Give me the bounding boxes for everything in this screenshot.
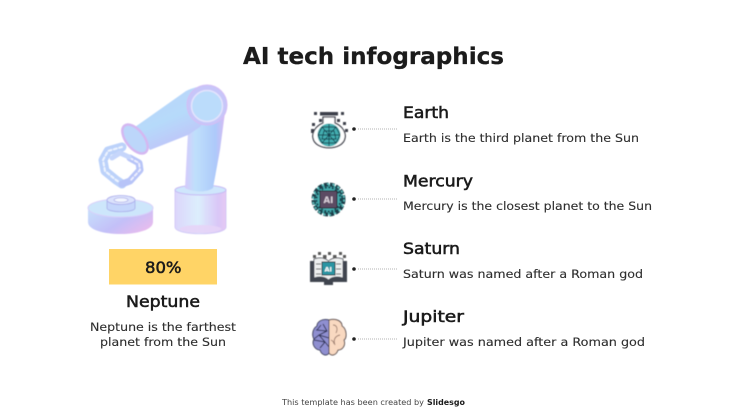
arm forearm (135, 86, 224, 150)
arm base (175, 185, 226, 234)
footer credit: Slidesgo (427, 398, 465, 407)
icon: flask with network (311, 112, 348, 148)
text: Saturn description: Saturn was named after a Roman god (403, 267, 643, 281)
text: Neptune description: Neptune is the farthest (90, 320, 237, 334)
heading: Saturn: Saturn (403, 239, 460, 258)
arm wrist (117, 120, 153, 158)
text: Mercury description: Mercury is the closest planet to the Sun (403, 199, 652, 213)
value badge: 80% (145, 258, 182, 277)
heading: Neptune: Neptune (126, 292, 200, 311)
connector: Saturn (352, 267, 398, 271)
icon: AI book: AI (324, 266, 332, 274)
heading: Jupiter: Jupiter (402, 307, 464, 326)
footer credit: This template has been created by (281, 398, 424, 407)
heading: Earth: Earth (403, 103, 449, 122)
connector: Earth (352, 127, 398, 131)
title: AI tech infographics (243, 42, 504, 70)
text: Earth description: Earth is the third planet from the Sun (403, 131, 639, 145)
text: Neptune description (90, 320, 237, 349)
text: Neptune description: planet from the Sun (100, 335, 226, 349)
icon: AI chip (313, 184, 344, 215)
arm joint (187, 85, 227, 125)
arm upright (185, 105, 226, 191)
icon: brain (313, 319, 346, 355)
text: Jupiter description: Jupiter was named after a Roman god (402, 335, 645, 349)
connector: Jupiter (352, 337, 398, 341)
icon: AI book (310, 252, 347, 285)
icon: AI chip: AI (324, 196, 333, 206)
disc (88, 196, 153, 234)
gripper (103, 147, 140, 184)
heading: Mercury: Mercury (403, 172, 473, 190)
value badge (109, 249, 217, 284)
illustration: robot arm (88, 85, 227, 234)
connector: Mercury (352, 197, 398, 201)
